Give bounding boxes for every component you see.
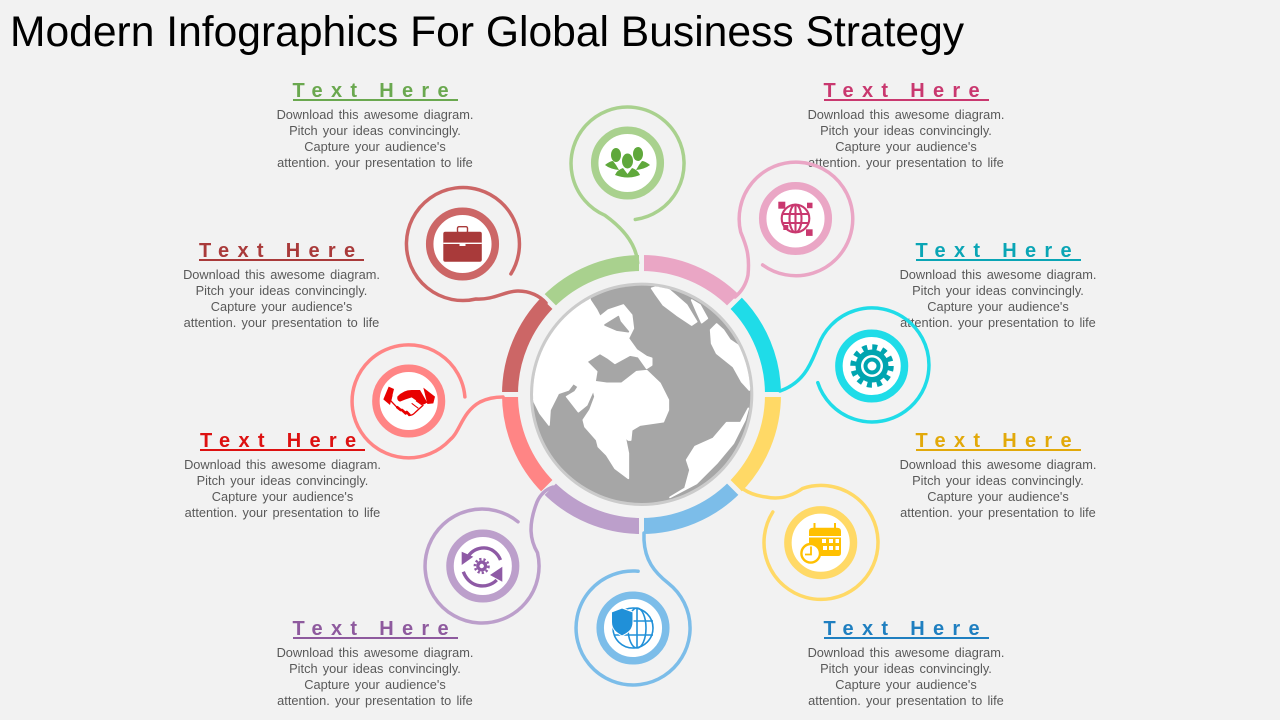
text block: salmon: Text Here bbox=[200, 430, 364, 452]
text block: blue: Pitch your ideas convincingly. bbox=[820, 661, 992, 676]
spiral and icon: red briefcase bbox=[406, 188, 546, 303]
text block: yellow: Text Here bbox=[916, 430, 1080, 452]
text block: cyan: Text Here bbox=[916, 240, 1080, 262]
text block: purple: attention. your presentation to life bbox=[277, 693, 473, 708]
text block: pink: Capture your audience's bbox=[835, 139, 977, 154]
text block: yellow: Download this awesome diagram. bbox=[900, 457, 1096, 472]
text block: green: attention. your presentation to life bbox=[277, 155, 473, 170]
text block: purple bbox=[277, 618, 473, 708]
text block: salmon bbox=[184, 430, 381, 520]
text block: purple: Pitch your ideas convincingly. bbox=[289, 661, 461, 676]
text block: salmon: Download this awesome diagram. bbox=[184, 457, 381, 472]
text block: pink: Download this awesome diagram. bbox=[808, 107, 1004, 122]
text block: blue: Text Here bbox=[824, 618, 988, 640]
text block: purple: Download this awesome diagram. bbox=[277, 645, 473, 660]
text block: cyan bbox=[900, 240, 1096, 330]
text block: green bbox=[277, 80, 473, 170]
text block: red bbox=[183, 240, 380, 330]
text block: cyan: Capture your audience's bbox=[927, 299, 1069, 314]
text block: blue: Download this awesome diagram. bbox=[808, 645, 1004, 660]
text block: pink bbox=[808, 80, 1004, 170]
text block: red: Capture your audience's bbox=[211, 299, 352, 314]
text block: green: Text Here bbox=[292, 80, 457, 102]
spiral and icon: cyan gear bbox=[780, 308, 929, 422]
segmented ring bbox=[492, 245, 791, 544]
text block: yellow: Capture your audience's bbox=[927, 489, 1069, 504]
text block: blue: Capture your audience's bbox=[835, 677, 977, 692]
spiral and icon: yellow calendar bbox=[743, 485, 878, 599]
text block: cyan: Pitch your ideas convincingly. bbox=[912, 283, 1084, 298]
text block: green: Capture your audience's bbox=[304, 139, 446, 154]
spiral and icon: pink globe bbox=[735, 162, 853, 297]
title: Modern Infographics For Global Business Strategy bbox=[10, 8, 964, 56]
spiral and icon: green people bbox=[571, 107, 684, 263]
text block: blue bbox=[808, 618, 1004, 708]
text block: cyan: Download this awesome diagram. bbox=[900, 267, 1096, 282]
text block: red: Text Here bbox=[199, 240, 363, 262]
text block: purple: Capture your audience's bbox=[304, 677, 446, 692]
spiral and icon: salmon handshake bbox=[352, 345, 503, 458]
text block: green: Download this awesome diagram. bbox=[277, 107, 473, 122]
text block: salmon: Capture your audience's bbox=[212, 489, 353, 504]
text block: salmon: Pitch your ideas convincingly. bbox=[197, 473, 368, 488]
text block: red: Pitch your ideas convincingly. bbox=[196, 283, 367, 298]
globe bbox=[520, 283, 757, 506]
text block: pink: attention. your presentation to life bbox=[808, 155, 1004, 170]
text block: yellow: Pitch your ideas convincingly. bbox=[912, 473, 1084, 488]
text block: cyan: attention. your presentation to life bbox=[900, 315, 1096, 330]
spiral and icon: blue shield globe bbox=[576, 533, 690, 685]
text block: red: attention. your presentation to life bbox=[184, 315, 379, 330]
text block: pink: Pitch your ideas convincingly. bbox=[820, 123, 992, 138]
text block: salmon: attention. your presentation to life bbox=[185, 505, 380, 520]
text block: purple: Text Here bbox=[292, 618, 457, 640]
text block: pink: Text Here bbox=[824, 80, 988, 102]
text block: yellow: attention. your presentation to life bbox=[900, 505, 1096, 520]
text block: blue: attention. your presentation to life bbox=[808, 693, 1004, 708]
text block: green: Pitch your ideas convincingly. bbox=[289, 123, 461, 138]
text block: yellow bbox=[900, 430, 1096, 520]
text block: red: Download this awesome diagram. bbox=[183, 267, 380, 282]
spiral and icon: purple refresh gear bbox=[425, 487, 553, 623]
